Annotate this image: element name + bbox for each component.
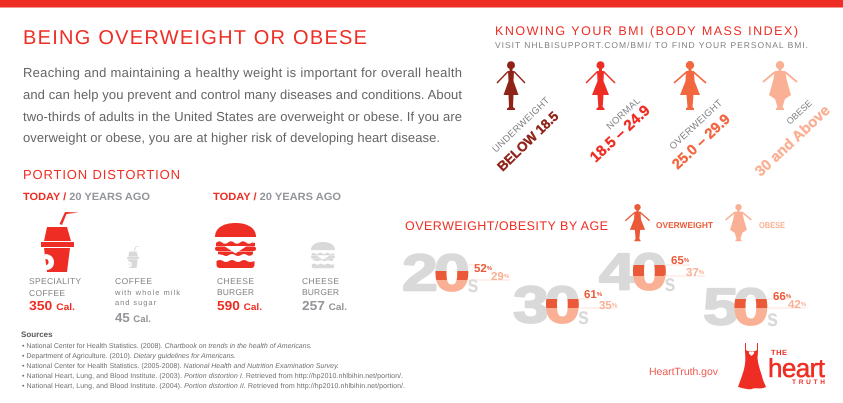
stat: age 50s: 0 <box>733 278 769 336</box>
value: 25.0 to 29.9: 25.0 – 29.9 <box>669 111 734 173</box>
website link: HeartTruth.gov <box>649 366 719 378</box>
icon: small cheeseburger <box>311 242 335 268</box>
stat: age 50s: 0 <box>733 278 769 336</box>
label: underweight: UNDERWEIGHT <box>490 95 552 155</box>
legend label: overweight: OVERWEIGHT <box>656 220 714 230</box>
stat: age 40s <box>598 252 705 292</box>
stat: age 30s: 61 <box>584 289 597 301</box>
sources: Sources <box>21 330 53 339</box>
stat: age 20s: 52 <box>474 263 487 275</box>
label: past cheeseburger <box>302 276 347 313</box>
panel: underweight BMI <box>490 61 562 174</box>
label: speciality coffee <box>29 276 81 313</box>
label: speciality coffee: SPECIALITY <box>29 276 81 286</box>
stat: age 40s: 65 <box>671 255 684 267</box>
value: 30 and above: 30 and Above <box>752 103 834 180</box>
subheading: BMI website: VISIT NHLBISUPPORT.COM/BMI/ TO FIND YOUR PERSONAL BMI. <box>495 40 808 50</box>
sources: • National Center for Health Statistics. (2008). Chartbook on trends in the health of Americans. <box>22 342 312 350</box>
stat: age 50s: % <box>786 293 792 300</box>
stat: age 50s: 5 <box>703 278 739 336</box>
stat: age 20s: 0 <box>434 244 470 302</box>
stat: age 50s: 66 <box>773 291 786 303</box>
stat: age 30s: % <box>612 302 618 309</box>
stat: age 50s: s <box>767 305 778 332</box>
stat: age 30s: 0 <box>544 276 580 334</box>
panel: normal BMI <box>586 61 654 166</box>
stat: age 40s: 0 <box>632 244 667 302</box>
sources: • Department of Agriculture. (2010). Dietary guidelines for Americans. <box>22 352 236 360</box>
icon: overweight figure <box>674 61 706 110</box>
heading: knowing your BMI: KNOWING YOUR BMI (BODY MASS INDEX) <box>495 24 798 38</box>
label: today cheeseburger: CHEESE <box>217 276 254 286</box>
intro paragraph: Reaching and maintaining a healthy weight is important for overall health <box>23 65 462 80</box>
legend label: obese: OBESE <box>759 220 785 230</box>
heading: portion distortion: PORTION DISTORTION <box>23 167 180 182</box>
stat: age 20s: 2 <box>402 244 438 302</box>
stat: age 40s: % <box>684 257 690 264</box>
intro paragraph: two-thirds of adults in the United States are overweight or obese. If you are <box>23 109 462 124</box>
logo text: heart <box>768 353 826 383</box>
icon: obese legend figure <box>726 204 751 241</box>
label: coffee with whole milk: 45 Cal. <box>115 310 151 325</box>
label: speciality coffee: 350 Cal. <box>29 298 75 313</box>
stat: age 50s: 42 <box>788 299 801 311</box>
burger column heading: TODAY / 20 YEARS AGO <box>213 191 341 203</box>
panel: coffee portion comparison <box>23 191 180 325</box>
sources: • National Heart, Lung, and Blood Institute. (2003). Portion distortion I. Retrieved from http://hp2010.nhlbihin.net/portion/. <box>22 372 403 380</box>
stat: age 20s: % <box>487 265 493 272</box>
icon: red dress <box>738 343 766 389</box>
icon: large cheeseburger <box>215 223 256 268</box>
logo: the heart truth <box>738 343 826 389</box>
stat: age 40s: 0 <box>632 244 667 302</box>
icon: small coffee cup <box>127 246 141 268</box>
label: normal: NORMAL <box>605 96 643 132</box>
label: coffee with whole milk: COFFEE <box>115 276 152 286</box>
stat: age 30s <box>514 285 618 324</box>
intro paragraph <box>23 65 462 145</box>
label: coffee with whole milk <box>114 276 180 325</box>
label: today cheeseburger <box>217 276 262 313</box>
icon: underweight figure <box>497 61 525 110</box>
stat: age 40s: 4 <box>599 244 635 302</box>
value: 18.5 to 24.9: 18.5 – 24.9 <box>587 102 654 166</box>
stat: age 30s: 35 <box>599 300 612 312</box>
stat: age 20s: % <box>504 273 510 280</box>
stat: age 40s: 0 <box>632 244 667 302</box>
logo text: THE <box>771 348 787 357</box>
top red bar <box>0 0 843 8</box>
icon: obese figure <box>763 61 797 110</box>
stat: age 30s: 0 <box>544 276 580 334</box>
intro paragraph: overweight or obese, you are at higher risk of developing heart disease. <box>23 130 440 145</box>
label: today cheeseburger: 590 Cal. <box>217 298 262 313</box>
icon: large speciality coffee cup <box>41 212 79 272</box>
label: speciality coffee: COFFEE <box>29 288 65 298</box>
stat: age 30s: 0 <box>544 276 580 334</box>
sources: • National Center for Health Statistics. (2005-2008). National Health and Nutrition Examination Survey. <box>22 362 339 370</box>
value: below 18.5: BELOW 18.5 <box>494 108 562 174</box>
label: coffee with whole milk: and sugar <box>115 298 156 307</box>
intro paragraph: and can help you prevent and control many diseases and conditions. About <box>23 87 462 102</box>
stat: age 20s: 0 <box>434 244 470 302</box>
stat: age 50s: % <box>801 301 807 308</box>
stat: age 30s: s <box>578 303 589 330</box>
stat: age 40s: % <box>699 269 705 276</box>
stat: age 20s <box>403 253 510 292</box>
legend: obese <box>726 204 785 241</box>
stat: age 50s: 0 <box>733 278 769 336</box>
logo text: TRUTH <box>792 379 825 386</box>
stat: age 40s: 37 <box>686 267 699 279</box>
label: obese: OBESE <box>785 98 814 126</box>
stat: age 30s: % <box>597 291 603 298</box>
stat: age 50s <box>704 287 806 326</box>
label: past cheeseburger: BURGER <box>302 287 339 297</box>
stat: age 30s: 3 <box>513 276 549 334</box>
stat: age 20s: s <box>468 271 478 298</box>
legend: overweight <box>625 204 714 241</box>
heading: overweight/obesity by age: OVERWEIGHT/OBESITY BY AGE <box>405 219 608 233</box>
stat: age 40s: s <box>664 270 676 297</box>
stat: age 20s: 29 <box>491 271 504 283</box>
panel: cheeseburger portion comparison <box>213 191 347 313</box>
sources: • National Heart, Lung, and Blood Institute. (2004). Portion distortion II. Retrieved from http://hp2010.nhlbihin.net/portion/. <box>22 382 405 390</box>
stat: age 20s: 0 <box>434 244 470 302</box>
label: coffee with whole milk: with whole milk <box>114 288 180 297</box>
sources <box>21 330 405 390</box>
title: BEING OVERWEIGHT OR OBESE <box>23 27 367 49</box>
coffee column heading: TODAY / 20 YEARS AGO <box>23 191 150 203</box>
icon: overweight legend figure <box>625 204 650 241</box>
panel: overweight BMI <box>668 61 734 173</box>
label: today cheeseburger: BURGER <box>217 287 254 297</box>
label: overweight: OVERWEIGHT <box>668 98 725 152</box>
label: past cheeseburger: 257 Cal. <box>302 298 347 313</box>
icon: normal figure <box>586 61 615 110</box>
label: past cheeseburger: CHEESE <box>302 276 339 286</box>
panel: obese BMI <box>752 61 834 180</box>
